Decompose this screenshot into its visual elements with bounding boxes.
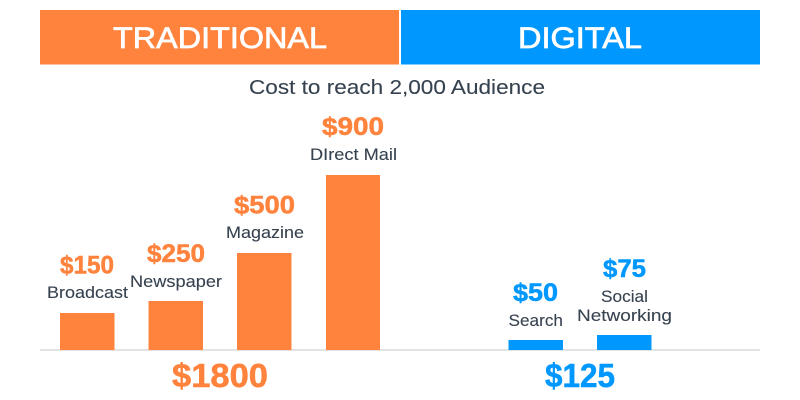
bar: search: Search xyxy=(508,312,563,330)
bar: newspaper: Newspaper xyxy=(130,273,223,291)
bar: direct mail xyxy=(310,113,397,350)
bar: magazine: $500 xyxy=(234,192,295,220)
bar: broadcast xyxy=(47,252,128,350)
header: traditional xyxy=(40,10,399,64)
header: digital: DIGITAL xyxy=(518,22,642,55)
bar: social networking: Networking xyxy=(577,307,672,325)
total: traditional: $1800 xyxy=(172,357,268,394)
header: traditional: TRADITIONAL xyxy=(113,22,327,55)
bar: search: $50 xyxy=(513,279,558,307)
bar: broadcast: $150 xyxy=(60,252,114,280)
bar: social networking: Social xyxy=(601,288,648,306)
header: digital xyxy=(401,10,760,64)
bar: social networking: $75 xyxy=(603,255,646,283)
subtitle: Cost to reach 2,000 Audience xyxy=(249,77,545,99)
bar: newspaper: $250 xyxy=(147,240,205,268)
bar: magazine xyxy=(226,192,304,350)
bar: broadcast: Broadcast xyxy=(47,284,128,302)
bar: magazine: Magazine xyxy=(226,224,304,242)
total: digital: $125 xyxy=(545,357,615,394)
bar: direct mail: DIrect Mail xyxy=(310,146,397,164)
bar: newspaper xyxy=(130,240,223,350)
bar: search xyxy=(508,279,563,350)
bar: direct mail: $900 xyxy=(322,113,384,141)
bar: social networking xyxy=(577,255,672,350)
